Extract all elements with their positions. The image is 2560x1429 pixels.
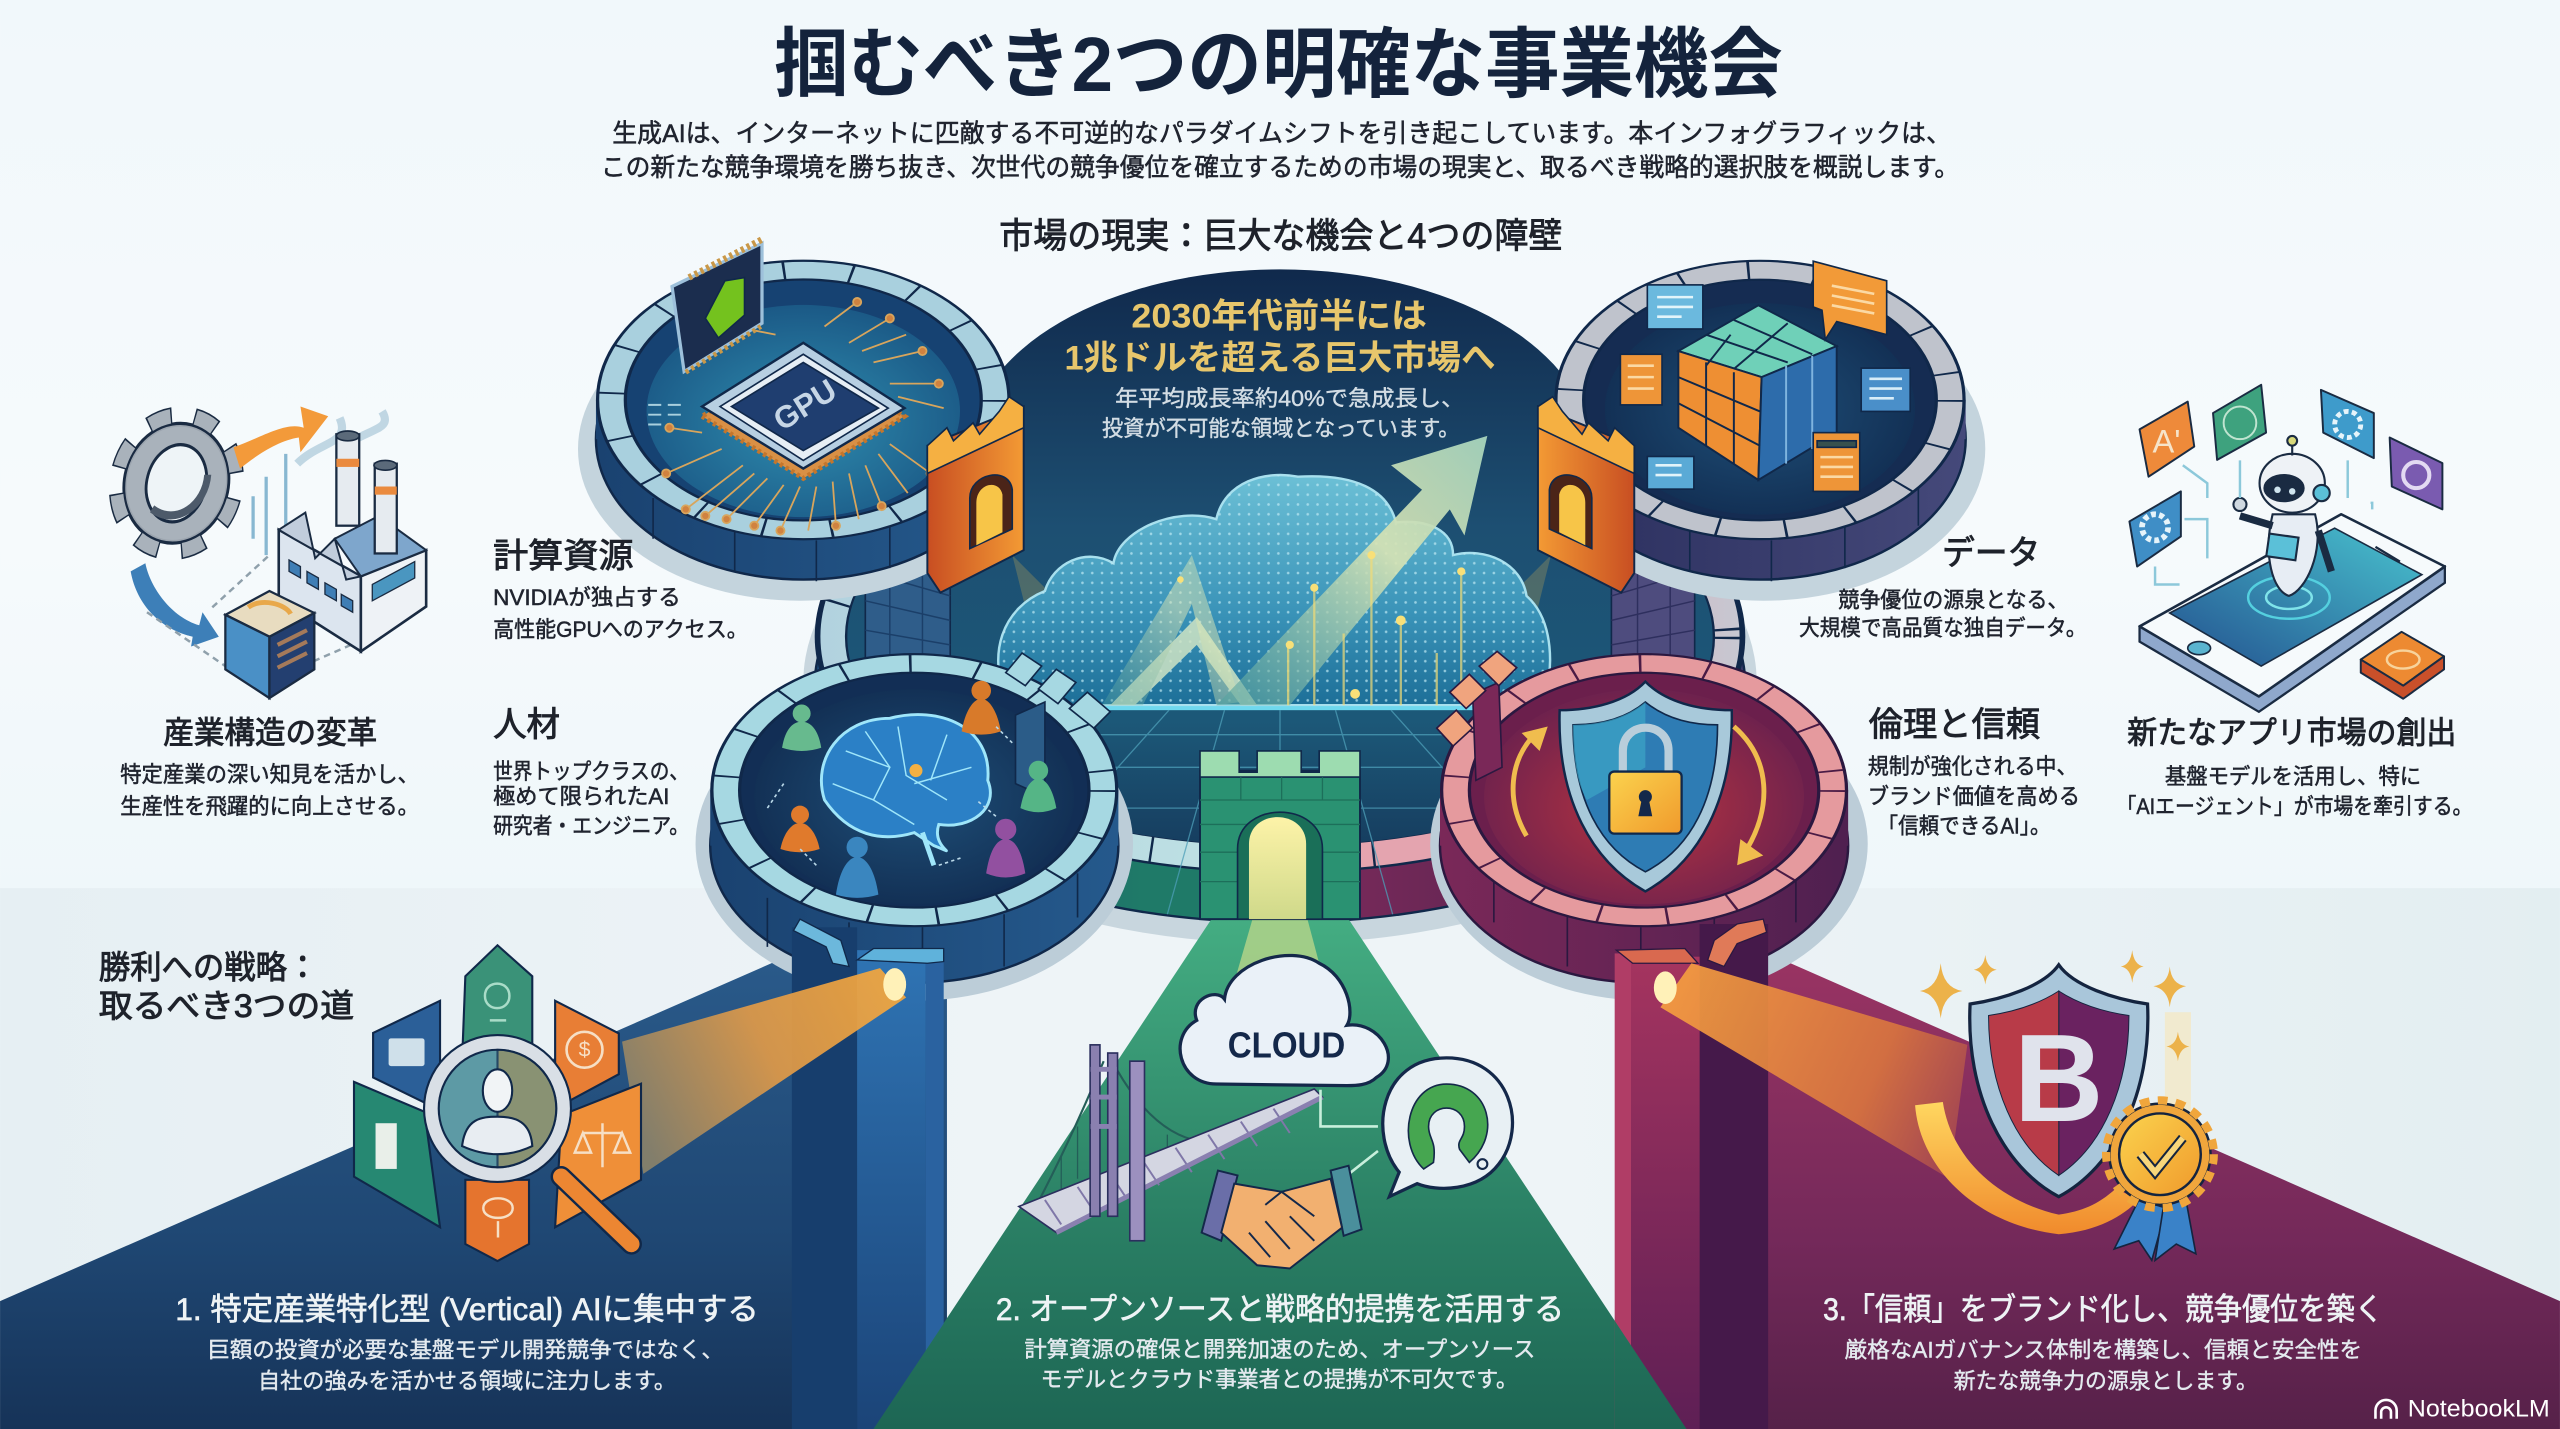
wall: right brick rampart: [1611, 539, 1695, 686]
icon: bridge: [1019, 1045, 1322, 1241]
section heading: strategy: [99, 949, 354, 1024]
text: data: データ: [1942, 534, 2040, 572]
text: compute resources: 計算資源: [493, 538, 633, 576]
text: strategy 1: 自社の強みを活かせる領域に注力します。: [258, 1368, 676, 1393]
icon: robot: [2233, 436, 2331, 596]
panel: compute fortress tower: [927, 397, 1024, 593]
icon: GPU chip: [702, 343, 905, 478]
intro paragraph: この新たな競争環境を勝ち抜き、次世代の競争優位を確立するための市場の現実と、取るべき戦略的選択肢を概説します。: [601, 154, 1959, 182]
text: talent: 人材: [493, 706, 560, 744]
text: data: 競争優位の源泉となる、: [1838, 587, 2069, 612]
text: talent: 世界トップクラスの、: [493, 759, 689, 784]
text: industry transformation: 特定産業の深い知見を活かし、: [120, 762, 419, 787]
market headline: 2030年代前半には: [1131, 298, 1427, 336]
text: data: [1799, 534, 2086, 641]
market headline: 年平均成長率約40%で急成長し、: [1115, 386, 1464, 411]
text: industry transformation: 生産性を飛躍的に向上させる。: [120, 794, 419, 819]
text: ethics and trust: ブランド価値を高める: [1868, 784, 2080, 809]
text: ethics and trust: 「信頼できるAI」。: [1878, 814, 2051, 839]
illustration: growth cloud and arrow: [980, 436, 1580, 914]
text: industry transformation: 産業構造の変革: [163, 716, 377, 751]
panel: data fortress tower: [1538, 397, 1634, 593]
text: strategy 2: 2. オープンソースと戦略的提携を活用する: [996, 1292, 1564, 1327]
icon: people: [767, 681, 1056, 898]
icon: vertical AI magnifier: [354, 945, 641, 1261]
text: strategy 3: 新たな競争力の源泉とします。: [1954, 1368, 2258, 1393]
text: new app market: 新たなアプリ市場の創出: [2127, 716, 2456, 751]
text: strategy 3: 厳格なAIガバナンス体制を構築し、信頼と安全性を: [1845, 1338, 2362, 1363]
icon: cloud: [1180, 955, 1388, 1086]
section heading: strategy: 取るべき3つの道: [99, 987, 354, 1024]
text: industry transformation: [120, 716, 419, 819]
beam: orange spotlight left: [622, 968, 906, 1174]
text: ethics and trust: 倫理と信頼: [1869, 706, 2040, 744]
icon: vertical AI magnifier: $: [579, 1038, 591, 1061]
text: data: 大規模で高品質な独自データ。: [1799, 616, 2086, 641]
icon: handshake: [1202, 1166, 1362, 1269]
icon: brand trust shield: B: [2014, 1010, 2104, 1148]
text: strategy 2: [996, 1292, 1564, 1392]
text: strategy 1: [175, 1292, 759, 1393]
text: talent: [493, 706, 689, 839]
icon: cloud: CLOUD: [1228, 1024, 1345, 1065]
text: strategy 3: [1823, 1292, 2383, 1393]
icon: sparkles: [1920, 950, 2189, 1061]
icon: refresh arrows: [1513, 726, 1764, 865]
panel: strategy floors: [0, 953, 2560, 1429]
icon: circuit traces: [648, 298, 944, 535]
section heading: strategy: 勝利への戦略：: [99, 949, 318, 986]
text: new app market: 「AIエージェント」が市場を牽引する。: [2117, 794, 2472, 819]
panel: compute resources ring: [578, 238, 1022, 601]
text: compute resources: [493, 538, 748, 642]
text: strategy 2: 計算資源の確保と開発加速のため、オープンソース: [1024, 1337, 1535, 1362]
icon: medal: [2106, 1100, 2214, 1260]
market headline: 1兆ドルを超える巨大市場へ: [1064, 339, 1496, 377]
text: talent: 研究者・エンジニア。: [493, 814, 689, 839]
panel: green path over pillar feet: [873, 1321, 1687, 1429]
icon: connector lines: [1320, 1090, 1378, 1175]
panel: green gate tower: [1200, 751, 1360, 919]
icon: glowing brain: [821, 715, 990, 865]
icon: open source speech bubble: [1383, 1058, 1512, 1197]
panel: data ring: [1541, 260, 1985, 601]
text: new app market: 基盤モデルを活用し、特に: [2165, 764, 2421, 789]
text: new app market: [2117, 716, 2472, 819]
icon: nvidia chip: [672, 238, 764, 372]
text: ethics and trust: 規制が強化される中、: [1868, 754, 2078, 779]
icon: battlement stones: [1437, 651, 1517, 780]
panel: ethics and trust ring: [1430, 651, 1868, 1001]
title: 掴むべき2つの明確な事業機会: [774, 23, 1783, 108]
icon: floating documents: [1620, 261, 1910, 491]
icon: app tiles: [2129, 385, 2444, 699]
icon: GPU chip: GPU: [767, 372, 843, 438]
wall: left brick rampart: [865, 539, 950, 686]
icon: app tiles: A': [2152, 422, 2181, 459]
text: strategy 2: モデルとクラウド事業者との提携が不可欠です。: [1041, 1367, 1518, 1392]
icon: industry gear and factory: [102, 402, 426, 698]
icon: battlement stones: [1006, 653, 1110, 797]
text: strategy 1: 巨額の投資が必要な基盤モデル開発競争ではなく、: [207, 1338, 724, 1363]
market headline: [1064, 298, 1496, 441]
icon: security shield and lock: [1559, 682, 1732, 891]
panel: blue pillar: [622, 919, 944, 1429]
panel: green path: [873, 914, 1687, 1429]
text: ethics and trust: [1868, 706, 2080, 839]
icon: AI agent phone: [2129, 385, 2445, 712]
text: compute resources: 高性能GPUへのアクセス。: [493, 617, 748, 642]
logo: NotebookLM: NotebookLM: [2408, 1395, 2550, 1422]
text: talent: 極めて限られたAI: [493, 784, 669, 809]
icon: data cube: [1678, 305, 1837, 480]
panel: crimson pillar: [1615, 919, 1967, 1429]
intro paragraph: [601, 120, 1959, 182]
panel: talent ring: [696, 653, 1133, 1001]
panel: central fortress market: [803, 269, 1757, 944]
text: strategy 1: 1. 特定産業特化型 (Vertical) AIに集中する: [175, 1292, 759, 1327]
text: strategy 3: 3.「信頼」をブランド化し、競争優位を築く: [1823, 1292, 2383, 1327]
section heading: market reality: 市場の現実：巨大な機会と4つの障壁: [999, 217, 1562, 256]
market headline: 投資が不可能な領域となっています。: [1102, 416, 1460, 441]
icon: brand trust shield: [1915, 950, 2214, 1260]
intro paragraph: 生成AIは、インターネットに匹敵する不可逆的なパラダイムシフトを引き起こしています。本インフォグラフィックは、: [612, 120, 1951, 148]
beam: orange spotlight right: [1654, 963, 1967, 1179]
text: compute resources: NVIDIAが独占する: [493, 585, 681, 610]
